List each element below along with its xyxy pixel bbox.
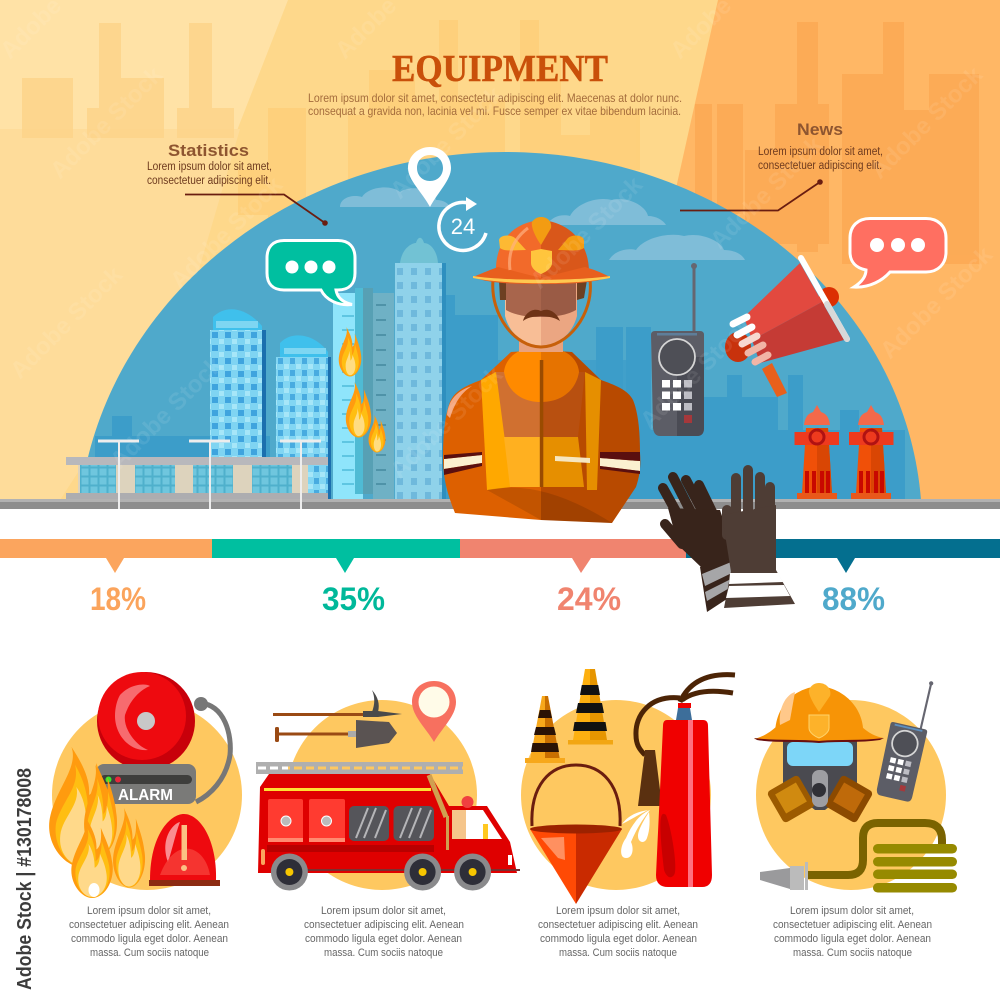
news callout: consectetuer adipiscing elit. — [758, 160, 882, 172]
firefighter — [443, 217, 640, 523]
icon: megaphone — [725, 258, 847, 397]
icon: 24 hour clock — [439, 197, 486, 250]
head — [493, 280, 590, 352]
jacket — [443, 350, 640, 523]
tall cone — [568, 669, 613, 744]
background skyline — [22, 20, 979, 264]
alarm text — [69, 905, 229, 959]
watermark: Adobe Stock — [385, 361, 508, 484]
icon: 24 hour clock: 24 — [451, 214, 475, 239]
watermark: Adobe Stock — [105, 351, 228, 474]
truck text: commodo ligula eget dolor. Aenean — [305, 933, 462, 945]
road — [0, 499, 1000, 509]
building 1 — [210, 309, 266, 500]
helmet — [473, 217, 610, 284]
hose — [760, 823, 957, 892]
statistics callout: Lorem ipsum dolor sit amet, — [147, 161, 272, 173]
alarm bell — [97, 672, 208, 770]
statistics callout — [147, 141, 328, 226]
alarm box — [96, 764, 196, 804]
watermark: Adobe Stock — [5, 261, 128, 384]
extinguisher — [636, 675, 735, 887]
bucket — [530, 765, 622, 904]
percentage 88: 88% — [822, 581, 885, 617]
shovel — [275, 720, 397, 748]
news callout — [680, 120, 883, 210]
statistic bars — [0, 539, 1000, 573]
building flames — [339, 327, 386, 452]
alarm text: consectetuer adipiscing elit. Aenean — [69, 919, 229, 931]
gear text: massa. Cum sociis natoque — [793, 947, 912, 959]
gear text: consectetuer adipiscing elit. Aenean — [773, 919, 932, 931]
extinguisher text — [538, 905, 698, 959]
panel: alarm — [49, 672, 242, 959]
panel: extinguisher — [521, 669, 735, 959]
watermark: Adobe Stock — [635, 311, 758, 434]
building 4 — [395, 238, 446, 499]
subtitle text — [308, 91, 682, 118]
speech bubble red — [850, 218, 946, 287]
statistics callout: Statistics — [168, 141, 249, 160]
percentage 18: 18% — [90, 581, 146, 617]
extinguisher text: Lorem ipsum dolor sit amet, — [556, 905, 680, 917]
low building — [66, 457, 328, 499]
alarm text: Lorem ipsum dolor sit amet, — [87, 905, 211, 917]
pickaxe — [273, 690, 402, 717]
watermark: Adobe Stock — [385, 81, 508, 204]
alarm wire — [196, 703, 230, 802]
gear text: Lorem ipsum dolor sit amet, — [790, 905, 914, 917]
watermark — [0, 0, 998, 484]
gas mask — [766, 740, 874, 824]
ladder — [256, 762, 463, 774]
extinguisher text: consectetuer adipiscing elit. Aenean — [538, 919, 698, 931]
percentage 35: 35% — [322, 581, 385, 617]
small walkie talkie — [874, 674, 939, 803]
watermark: Adobe Stock — [875, 241, 998, 364]
news callout: Lorem ipsum dolor sit amet, — [758, 146, 883, 158]
icon: hydrants — [794, 405, 894, 499]
title: EQUIPMENT — [392, 48, 608, 90]
truck text: massa. Cum sociis natoque — [324, 947, 443, 959]
back skyline — [95, 295, 905, 500]
icon: walkie talkie — [651, 263, 704, 436]
alarm text: commodo ligula eget dolor. Aenean — [71, 933, 228, 945]
subtitle text: Lorem ipsum dolor sit amet, consectetur adipiscing elit. Maecenas at dolor nunc. — [308, 91, 682, 105]
building 2 — [276, 335, 331, 500]
percentage 24: 24% — [557, 581, 621, 617]
extinguisher text: commodo ligula eget dolor. Aenean — [540, 933, 697, 945]
panel: protective gear — [754, 674, 957, 959]
orange helmet — [754, 683, 884, 743]
alarm siren — [149, 814, 220, 886]
alarm text: massa. Cum sociis natoque — [90, 947, 209, 959]
truck text: consectetuer adipiscing elit. Aenean — [304, 919, 464, 931]
watermark: Adobe Stock — [525, 171, 648, 294]
gear text: commodo ligula eget dolor. Aenean — [774, 933, 931, 945]
stock credit: Adobe Stock | #130178008 — [14, 768, 36, 990]
news callout: News — [797, 120, 843, 139]
watermark: Adobe Stock — [165, 171, 288, 294]
speech bubble green — [267, 240, 355, 305]
watermark: Adobe Stock — [865, 61, 988, 184]
map pin — [412, 681, 456, 742]
icon: gloves — [663, 470, 795, 612]
truck text — [304, 905, 464, 959]
street lamps — [98, 440, 321, 509]
truck — [258, 774, 520, 890]
alarm box: ALARM — [118, 787, 173, 804]
subtitle text: consequat a gravida non, lacinia vel mi. Fusce semper ex vitae bibendum lacinia. — [308, 104, 681, 118]
water drops — [621, 810, 650, 858]
header background — [0, 0, 1000, 500]
panel: fire truck — [256, 681, 520, 959]
truck text: Lorem ipsum dolor sit amet, — [321, 905, 446, 917]
dome city scene — [0, 152, 1000, 509]
gear text — [773, 905, 932, 959]
small cone — [525, 696, 565, 763]
alarm flames — [49, 747, 145, 898]
icon: location pin — [408, 147, 451, 207]
extinguisher text: massa. Cum sociis natoque — [559, 947, 677, 959]
watermark: Adobe Stock — [45, 61, 168, 184]
statistics callout: consectetuer adipiscing elit. — [147, 175, 271, 187]
building 3 — [333, 288, 394, 499]
clouds — [340, 187, 745, 260]
watermark: Adobe Stock — [705, 131, 828, 254]
